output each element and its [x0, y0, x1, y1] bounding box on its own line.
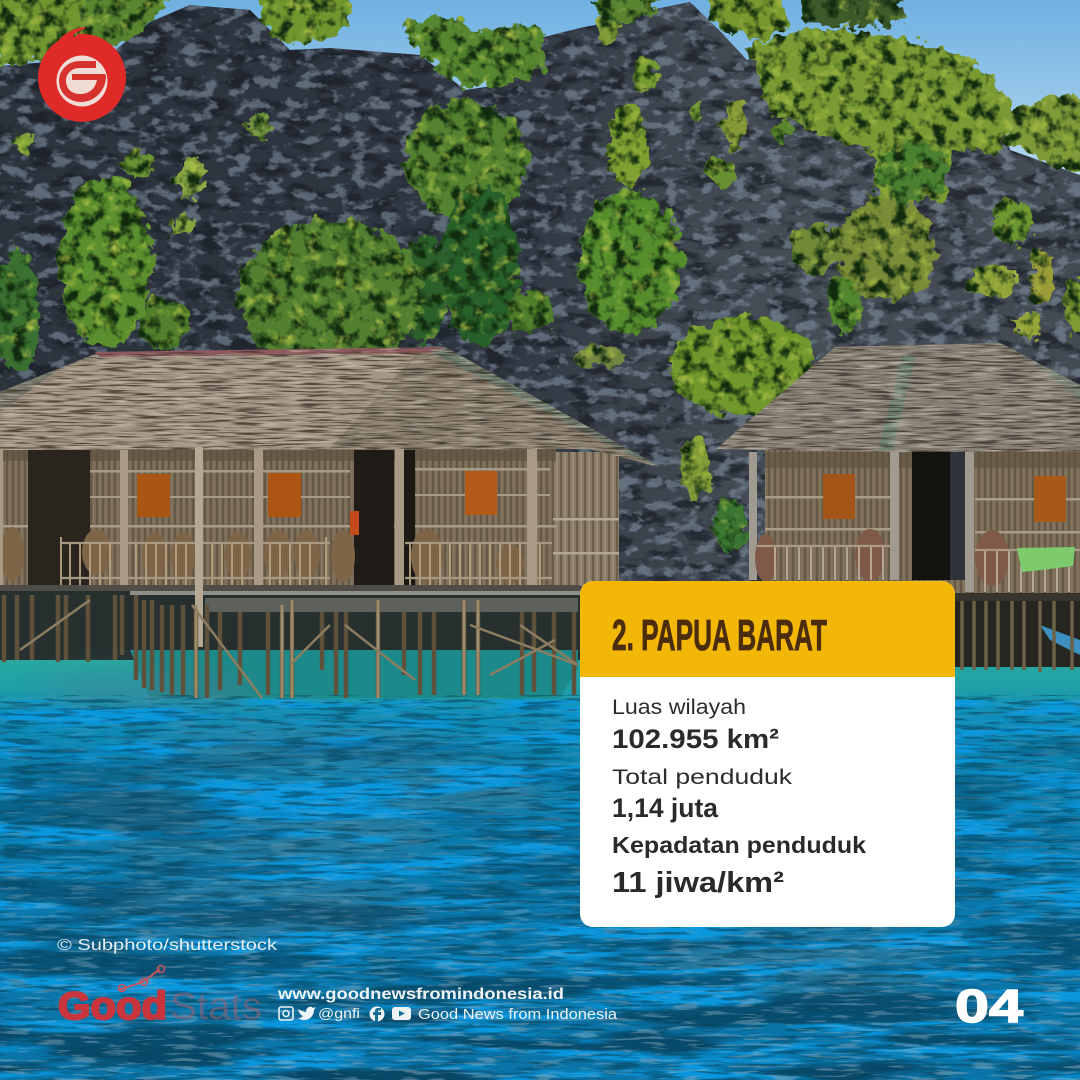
posts	[0, 447, 537, 585]
brand logo: red circle	[38, 27, 126, 122]
GoodStats logo	[58, 966, 262, 1028]
logo wordmark light: Stats	[170, 986, 262, 1028]
logo trend line	[118, 966, 164, 992]
posts	[749, 450, 974, 592]
stilts	[4, 595, 574, 698]
stat: density value: 11 jiwa/km²	[612, 867, 784, 899]
channel name: Good News from Indonesia	[418, 1006, 618, 1023]
deck and stilts	[955, 593, 1080, 601]
heading: region name: 2. PAPUA BARAT	[612, 611, 827, 660]
icon: facebook	[370, 1006, 384, 1022]
stat: area value: 102.955 km²	[612, 724, 779, 754]
chairs	[0, 527, 524, 584]
green cloth	[1017, 547, 1075, 572]
chairs	[755, 529, 1009, 586]
stat: density label: Kepadatan penduduk	[612, 832, 866, 858]
left stilt house	[0, 340, 670, 698]
railing	[61, 537, 540, 585]
website url: www.goodnewsfromindonesia.id	[277, 986, 564, 1003]
railing	[775, 545, 1069, 592]
icon: youtube	[392, 1007, 411, 1020]
photo credit: © Subphoto/shutterstock	[57, 937, 277, 954]
red cloth	[350, 511, 359, 535]
right stilt house	[710, 340, 1080, 672]
page number: 04	[955, 980, 1024, 1032]
orange window shutters	[137, 474, 170, 517]
yellow card header	[580, 581, 955, 677]
walls	[765, 450, 1080, 595]
thatched roof	[0, 340, 670, 470]
info card	[580, 581, 955, 927]
social handle: @gnfi	[318, 1006, 360, 1021]
thatched roof	[710, 340, 1080, 455]
walls	[0, 445, 556, 587]
logo wordmark: Good	[58, 985, 167, 1028]
sky	[0, 0, 1080, 190]
dark openings	[28, 450, 90, 585]
website and social links	[277, 986, 618, 1023]
icon: twitter	[298, 1007, 316, 1020]
stat: population value: 1,14 juta	[612, 793, 719, 823]
decks	[0, 585, 580, 591]
icon: instagram	[279, 1007, 293, 1020]
tall pole	[195, 447, 203, 647]
dark doorway	[912, 450, 950, 580]
stat: area label: Luas wilayah	[612, 696, 746, 719]
rock cliff	[0, 0, 1080, 600]
card body	[580, 581, 955, 927]
orange window shutters	[823, 474, 855, 519]
under-deck shadow	[0, 590, 1080, 665]
water	[0, 650, 1080, 1080]
vegetation on the cliff	[0, 0, 1080, 551]
stat: population label: Total penduduk	[612, 766, 793, 789]
